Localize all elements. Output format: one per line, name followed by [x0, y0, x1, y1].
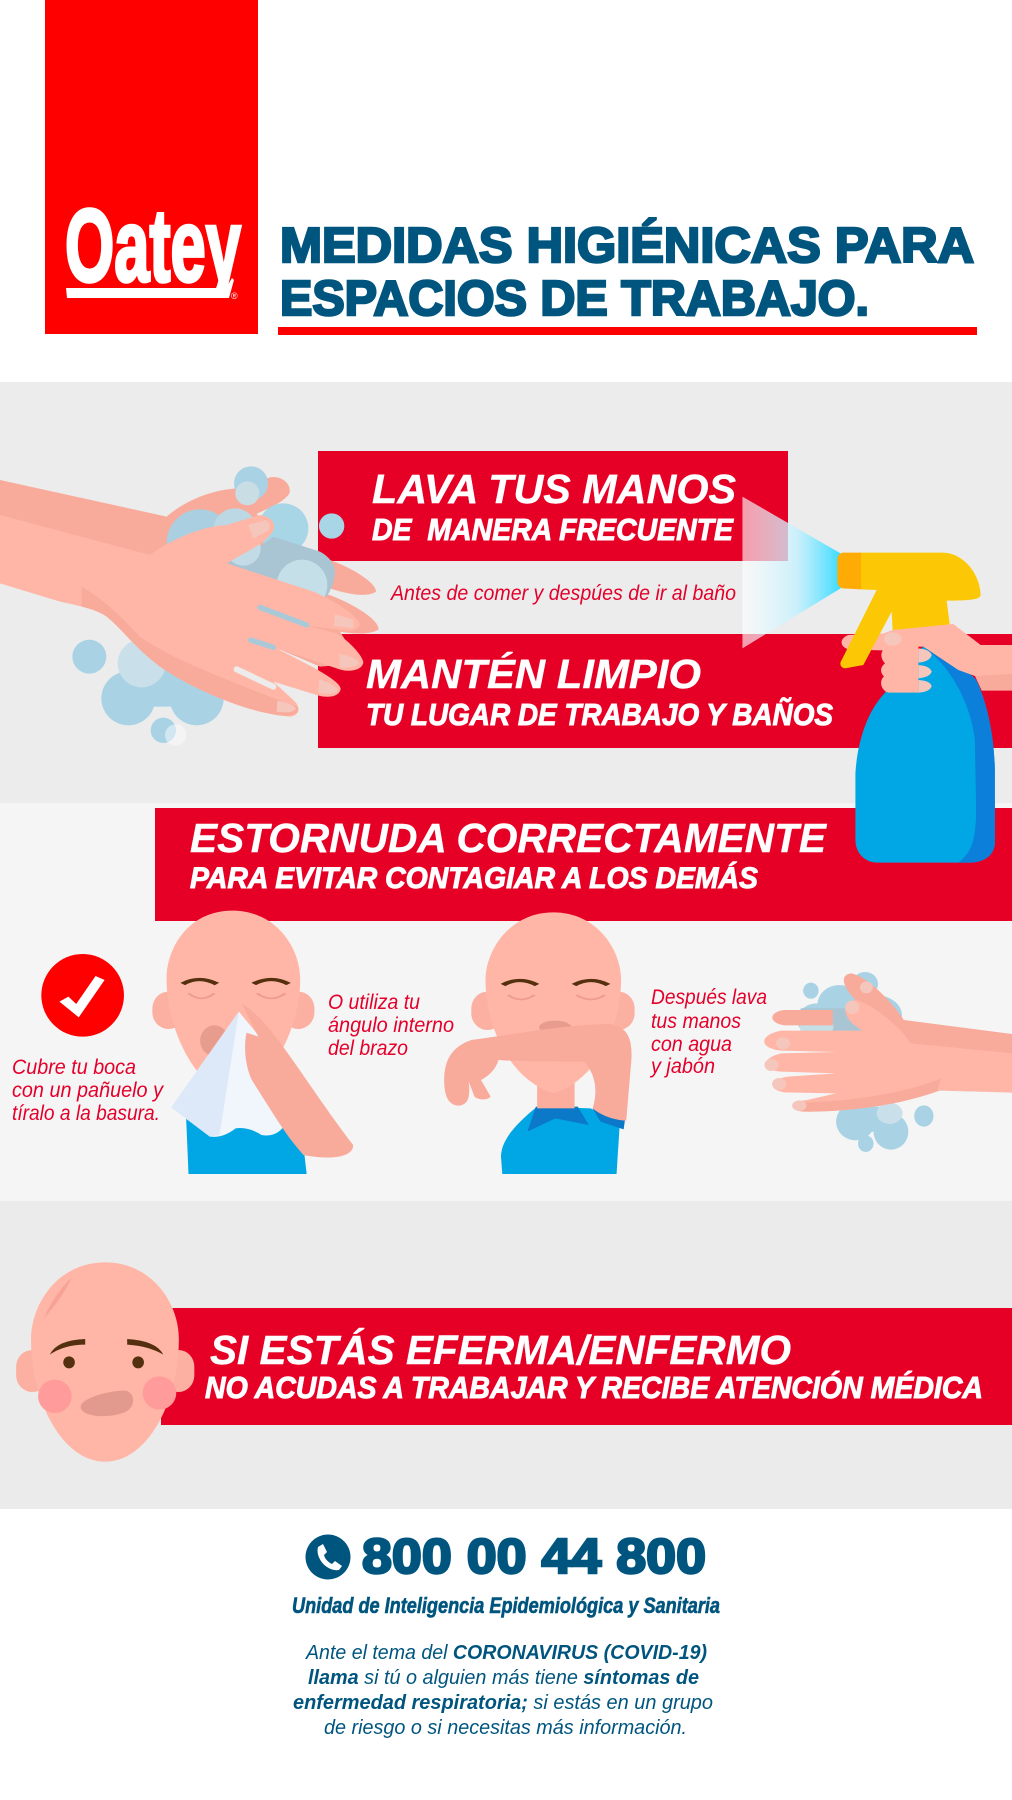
- eyebrows: [183, 979, 217, 984]
- coronavirus text block: llama si tú o alguien más tiene síntomas de: [308, 1667, 699, 1689]
- back arm: [844, 973, 1012, 1054]
- illustration: man covering with tissue: [152, 911, 353, 1174]
- lower soap highlight: [877, 1103, 903, 1124]
- shaded wrist: [975, 674, 1012, 691]
- eyebrows: [503, 980, 537, 985]
- front hand: [764, 1000, 1012, 1112]
- unit name: Unidad de Inteligencia Epidemiológica y Sanitaria: [292, 1593, 720, 1618]
- cuff: [593, 1108, 625, 1129]
- head: [31, 1262, 179, 1462]
- forehead highlight: [44, 1278, 72, 1318]
- caption: después lava: y jabón: [649, 1055, 715, 1078]
- icon: check mark: [41, 954, 124, 1037]
- caption: antes de comer: Antes de comer y despúes de ir al baño: [389, 582, 736, 605]
- banner: si estás enferma: [161, 1308, 1012, 1425]
- banner: lava tus manos: DE MANERA FRECUENTE: [372, 512, 734, 547]
- shirt: [186, 1113, 307, 1174]
- caption: después lava: tus manos: [651, 1010, 741, 1033]
- banner: mantén limpio: MANTÉN LIMPIO: [366, 651, 701, 697]
- caption: ángulo interno: del brazo: [328, 1037, 408, 1060]
- nose: [539, 1021, 571, 1034]
- bottle body: [855, 647, 995, 863]
- icon: phone: [306, 1534, 350, 1580]
- head: [485, 912, 621, 1093]
- illustration: washing hands: [0, 466, 379, 746]
- caption: cubre tu boca: [12, 1056, 164, 1125]
- finger gaps: [260, 607, 307, 625]
- banner: lava tus manos: [318, 451, 788, 561]
- back hand: [0, 477, 379, 667]
- coronavirus text block: de riesgo o si necesitas más información.: [324, 1717, 687, 1739]
- yellow spray head: [840, 553, 981, 668]
- registered mark: ®: [231, 291, 238, 301]
- banner: lava tus manos: LAVA TUS MANOS: [372, 466, 736, 512]
- neck: [537, 1080, 575, 1108]
- upper soap bubbles: [167, 466, 335, 610]
- arm and hand: [242, 1004, 353, 1158]
- caption: después lava: [649, 986, 767, 1078]
- soap bubbles: [797, 972, 934, 1152]
- shaded palm edge: [82, 587, 298, 716]
- lower soap bubbles: [72, 639, 224, 746]
- cheeks: [38, 1380, 72, 1413]
- knuckles: [884, 632, 932, 693]
- caption: ángulo interno: ángulo interno: [328, 1014, 454, 1037]
- illustration: spray bottle: [742, 497, 1012, 863]
- fingernails: [248, 520, 359, 712]
- orange nozzle: [837, 553, 861, 589]
- eyes: [63, 1356, 75, 1368]
- logo wordmark: Oatey: [65, 188, 241, 303]
- banner: estornuda correctamente: ESTORNUDA CORRECTAMENTE: [190, 815, 828, 861]
- ears: [16, 1350, 48, 1392]
- ears: [152, 992, 185, 1029]
- collar: [527, 1107, 589, 1132]
- mouth: [81, 1391, 133, 1416]
- illustration: sick face: [16, 1262, 194, 1462]
- logo underline swoosh: [66, 278, 234, 298]
- front hand: [0, 515, 363, 717]
- eyebrows: [50, 1339, 85, 1355]
- title: MEDIDAS HIGIÉNICAS PARA: [280, 219, 974, 273]
- caption: cubre tu boca: tíralo a la basura.: [12, 1102, 160, 1125]
- illustration: man sneezing into elbow: [444, 912, 635, 1174]
- title: ESPACIOS DE TRABAJO.: [280, 272, 869, 326]
- banner: mantén limpio: TU LUGAR DE TRABAJO Y BAÑOS: [366, 697, 833, 732]
- ears: [471, 992, 504, 1030]
- title underline: [278, 327, 977, 335]
- banner: estornuda correctamente: PARA EVITAR CONTAGIAR A LOS DEMÁS: [190, 861, 758, 895]
- phone number: 800 00 44 800: [362, 1530, 706, 1584]
- trigger and hand: [837, 553, 1012, 693]
- fingernails: [764, 981, 873, 1111]
- elbow arm: [444, 1024, 632, 1121]
- finger behind trigger: [842, 633, 890, 651]
- soap bubble over banner: [319, 513, 344, 539]
- caption: después lava: Después lava: [651, 986, 767, 1009]
- hand gripping bottle: [881, 624, 1012, 693]
- mouth: [200, 1025, 229, 1056]
- banner: estornuda correctamente: [155, 808, 1012, 921]
- caption: cubre tu boca: con un pañuelo y: [12, 1079, 164, 1102]
- closed eyes: [508, 995, 535, 999]
- closed eyes: [189, 993, 214, 998]
- shirt: [501, 1107, 620, 1174]
- banner: mantén limpio: [318, 634, 1012, 748]
- coronavirus text block: enfermedad respiratoria; si estás en un grupo: [293, 1692, 713, 1714]
- back finger: [772, 1010, 833, 1025]
- title: [280, 219, 974, 326]
- header logo block: [45, 0, 258, 334]
- soap highlight: [801, 1008, 862, 1035]
- caption: ángulo interno: O utiliza tu: [328, 991, 420, 1014]
- panel: handwashing and cleaning: [0, 382, 1012, 803]
- caption: después lava: con agua: [651, 1033, 732, 1056]
- tissue: [171, 1012, 287, 1137]
- head: [167, 911, 300, 1097]
- illustration: washing hands small: [764, 972, 1012, 1152]
- coronavirus text block: Ante el tema del CORONAVIRUS (COVID-19): [305, 1642, 707, 1664]
- panel: sick at home: [0, 1201, 1012, 1509]
- banner: si estás enferma: SI ESTÁS EFERMA/ENFERMO: [210, 1327, 791, 1373]
- coronavirus text block: [293, 1642, 713, 1739]
- spray mist: [742, 497, 841, 648]
- panel: sneezing: [0, 803, 1012, 1201]
- caption: cubre tu boca: Cubre tu boca: [12, 1056, 136, 1079]
- caption: ángulo interno: [328, 991, 454, 1060]
- shaded edge: [793, 1078, 1012, 1112]
